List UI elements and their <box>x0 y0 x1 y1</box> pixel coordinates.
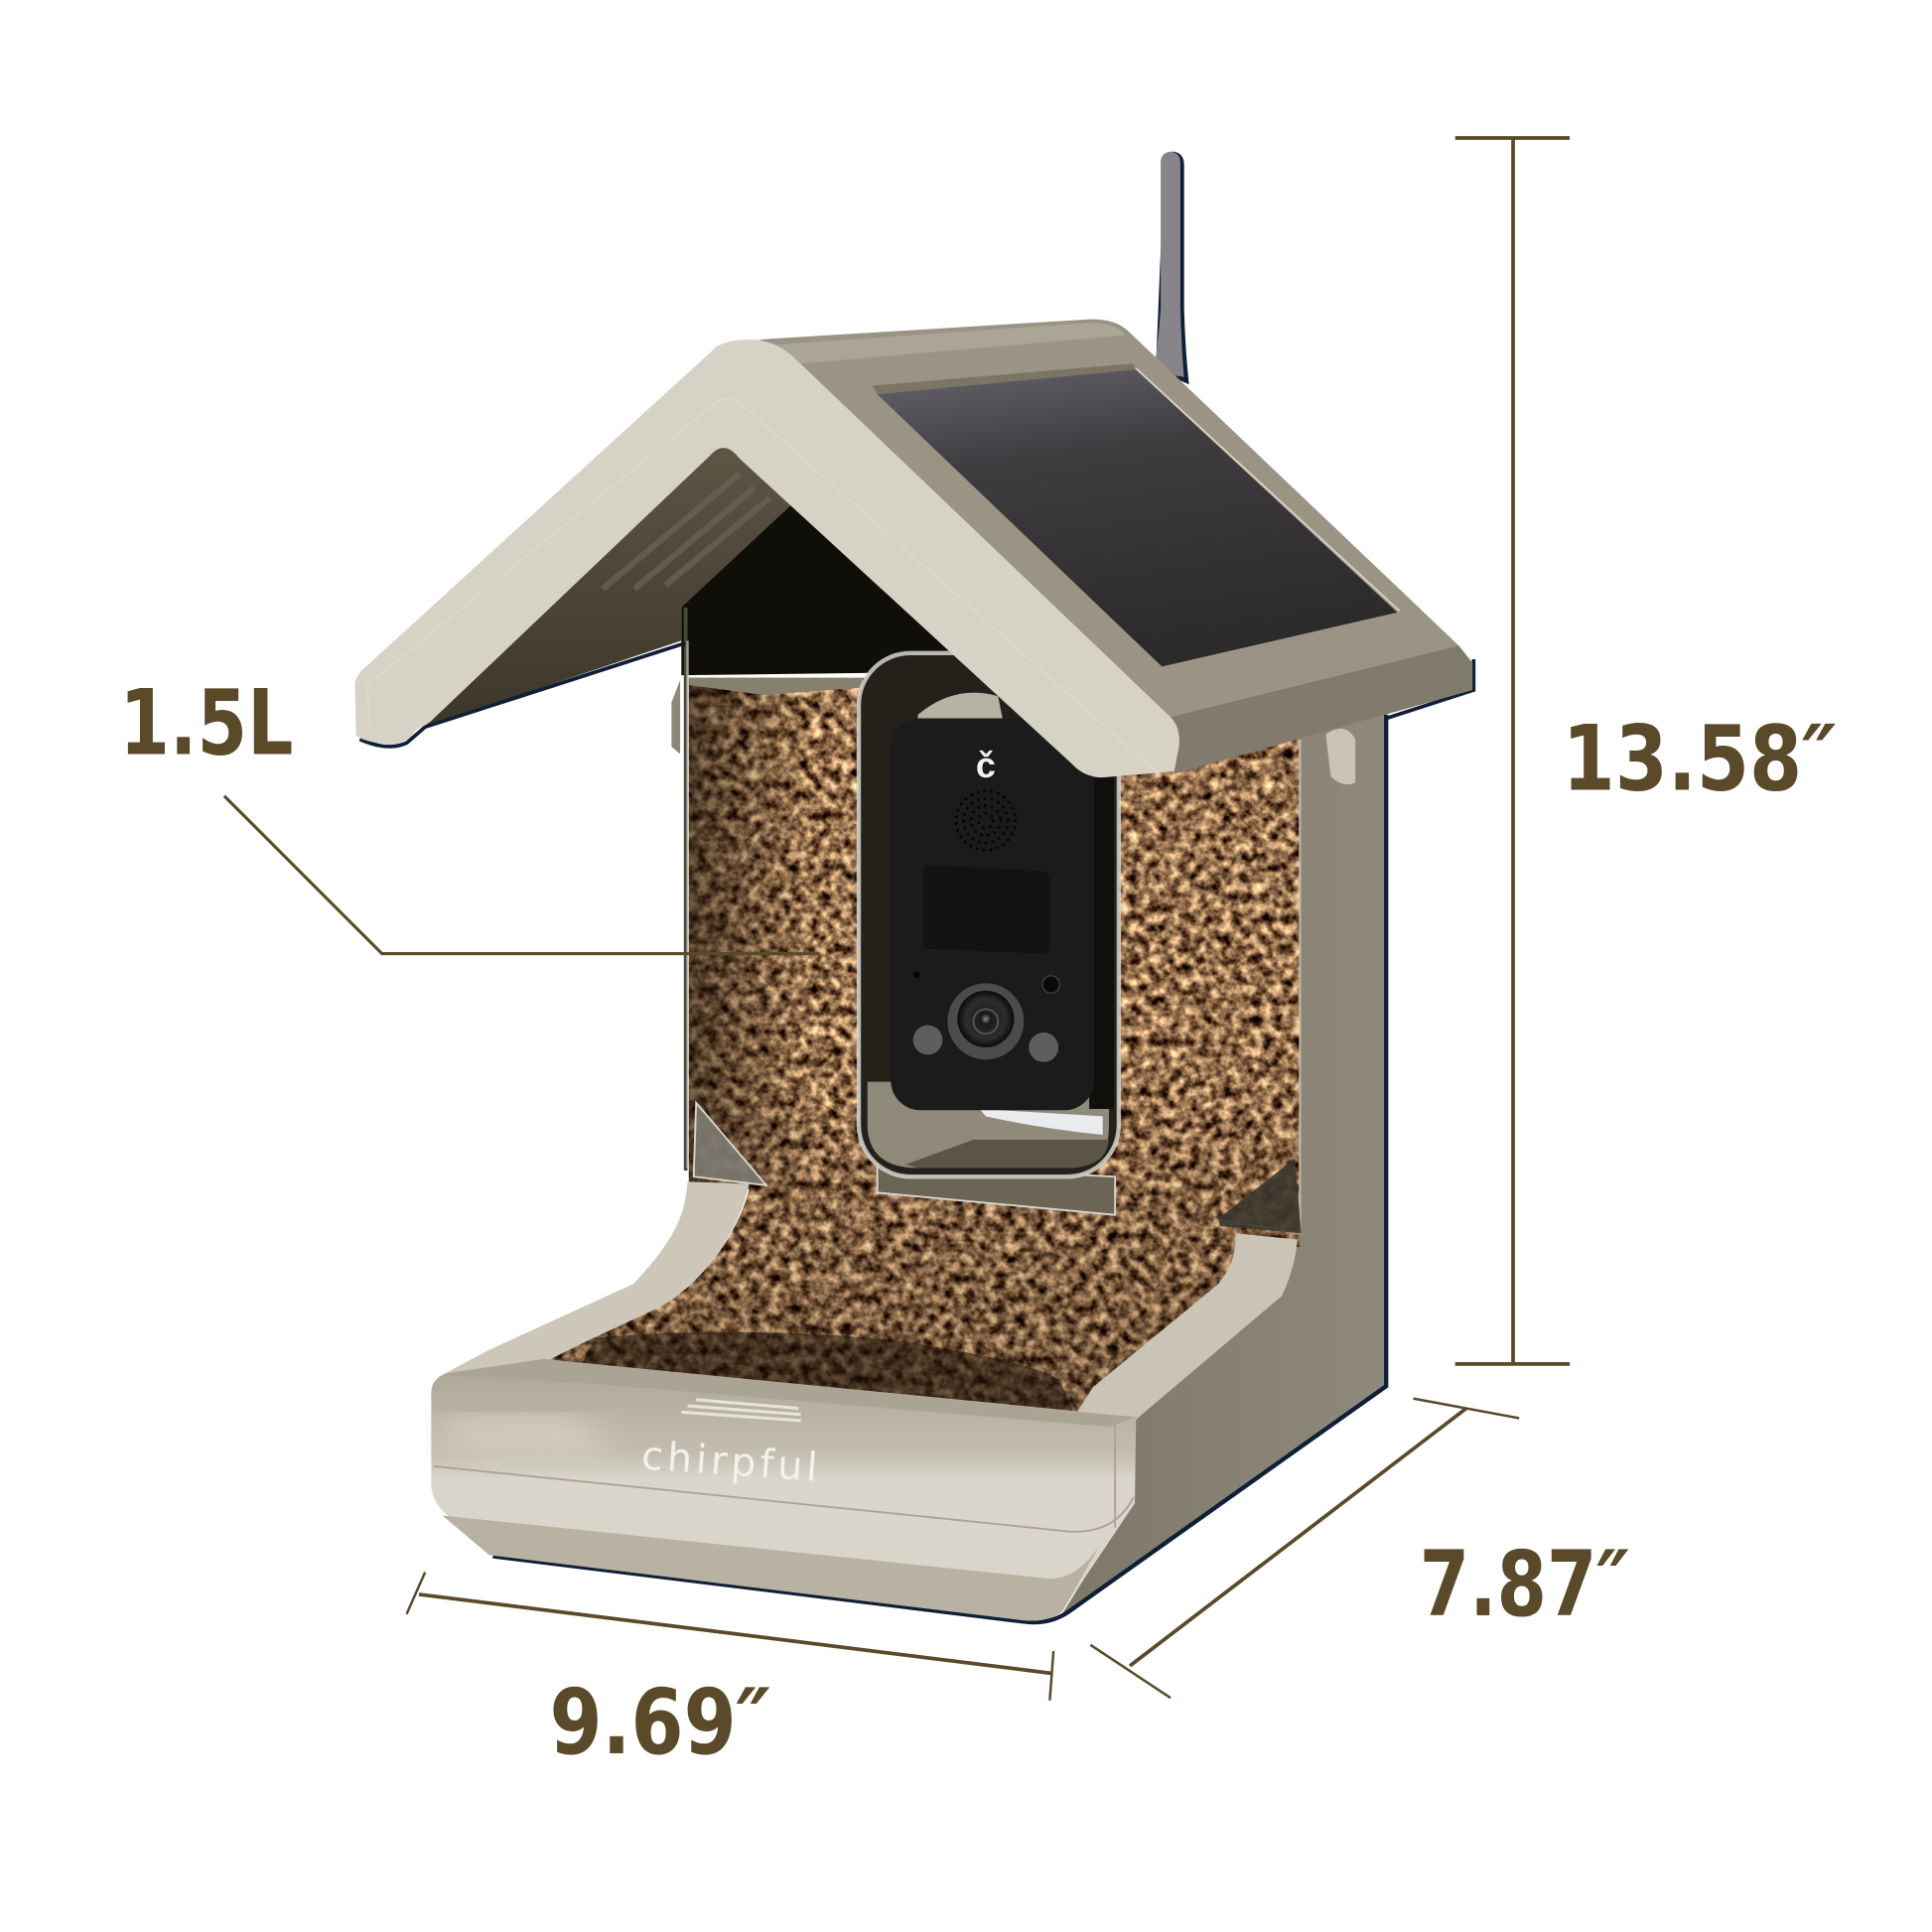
highlight below camera <box>980 1109 1103 1135</box>
side mounting clip <box>1325 729 1355 784</box>
navy roof shadow <box>359 643 1473 747</box>
right curved tray wall <box>1075 1233 1298 1420</box>
housing floor shadow <box>905 1140 1109 1169</box>
navy shadow edge of body <box>492 715 1386 1622</box>
depth dimension line <box>1090 1399 1519 1698</box>
light sensor <box>1042 976 1059 993</box>
left side clip <box>671 680 680 755</box>
feeder product illustration <box>354 152 1473 1622</box>
body side panel <box>1062 705 1386 1614</box>
left LED <box>913 1026 942 1054</box>
tray vent ridges <box>681 1400 801 1421</box>
tray seam <box>434 1423 1134 1532</box>
hopper back edge <box>684 608 688 1171</box>
tray front <box>431 1359 1136 1620</box>
antenna <box>1154 152 1189 384</box>
seed hopper <box>530 659 1318 1430</box>
feed tray shadow <box>579 1332 1075 1417</box>
width label: 9.69″ <box>550 1671 770 1775</box>
sensor dots <box>913 972 919 978</box>
right LED <box>1029 1033 1058 1062</box>
roof front fascia <box>354 340 1179 777</box>
width dimension line <box>407 1573 1053 1701</box>
hopper shading <box>689 678 799 1195</box>
underside ribs <box>603 475 770 589</box>
roof side plane <box>740 319 1472 773</box>
roof upper strip <box>770 323 1126 364</box>
camera housing window <box>859 653 1119 1176</box>
capacity label: 1.5L <box>119 672 293 776</box>
height label: 13.58″ <box>1563 708 1836 812</box>
right corner bracket <box>1218 1159 1302 1233</box>
clear bracket under camera <box>878 1165 1115 1215</box>
height dimension line <box>1455 138 1570 1364</box>
roof underside <box>424 434 801 727</box>
camera module <box>891 693 1094 1110</box>
left curved tray wall <box>438 1181 750 1378</box>
tray top rim <box>444 1359 1136 1427</box>
speaker grille <box>956 791 1016 850</box>
display screen <box>923 865 1049 954</box>
fascia inner ridge <box>367 399 1159 773</box>
housing lower interior <box>868 1082 1109 1169</box>
lens <box>946 982 1026 1061</box>
roof lower edge strip <box>1171 645 1472 773</box>
left corner bracket <box>694 1103 766 1185</box>
clear panel edge <box>688 640 1300 1233</box>
brand name on tray: chirpful <box>640 1433 823 1491</box>
camera logo: č <box>976 745 996 785</box>
tray lower band <box>443 1516 1103 1620</box>
dark interior below roof <box>681 499 998 709</box>
solar panel <box>873 363 1400 666</box>
depth label: 7.87″ <box>1420 1533 1629 1637</box>
dark right side <box>1089 740 1114 1109</box>
capacity leader line <box>224 796 819 954</box>
pale band above seeds <box>689 677 863 695</box>
tray mottled highlight <box>444 1417 617 1460</box>
lower seed shade <box>530 1109 1318 1417</box>
